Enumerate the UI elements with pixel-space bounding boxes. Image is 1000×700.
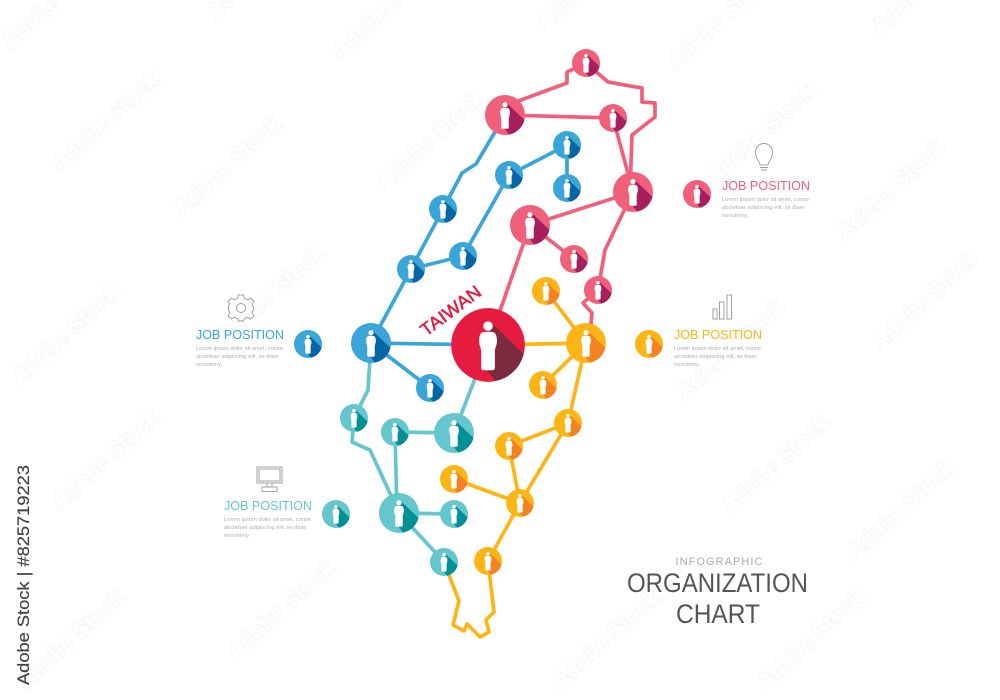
node: pink small south (584, 276, 612, 304)
panel: teal job position (224, 467, 350, 539)
text block: teal description: Lorem ipsum dolor sit amet, conse (224, 517, 311, 523)
node: orange hub (506, 489, 534, 517)
node: orange west (440, 465, 468, 493)
text block: orange description: abctetuer adipiscing elit, se diam (674, 354, 757, 360)
watermark pattern: Adobe Stock (672, 295, 789, 404)
blue nodes (351, 131, 581, 402)
node: teal right (440, 500, 468, 528)
watermark pattern: Adobe Stock (702, 80, 819, 189)
pink network lines (488, 63, 655, 345)
heading: job position orange: JOB POSITION (674, 327, 762, 342)
node: teal west (340, 404, 368, 432)
node: orange large (566, 323, 606, 363)
watermark pattern: Adobe Stock (7, 280, 124, 389)
heading: job position blue: JOB POSITION (196, 327, 284, 342)
watermark pattern: Adobe Stock (842, 455, 959, 564)
text block: pink description: nonummy. (722, 213, 749, 219)
node: orange south (474, 547, 502, 575)
text block: blue description: nonummy. (196, 362, 223, 368)
node: blue top (553, 131, 581, 159)
node: blue west upper (429, 195, 457, 223)
node: pink large central (510, 205, 550, 245)
node: teal large upper (434, 413, 474, 453)
text block: orange description: nonummy. (674, 362, 701, 368)
text block: blue description: Lorem ipsum dolor sit amet, conse (196, 346, 283, 352)
icon: computer (257, 467, 282, 492)
watermark pattern: Adobe Stock (752, 585, 869, 694)
watermark pattern: Adobe Stock (832, 135, 949, 244)
legend node: orange (635, 330, 663, 358)
pink nodes (485, 49, 653, 304)
panel: blue job position (196, 295, 322, 368)
title: chart: CHART (676, 599, 760, 629)
watermark pattern: Adobe Stock (867, 245, 984, 354)
heading: job position pink: JOB POSITION (722, 178, 810, 193)
node: teal large lower (379, 493, 419, 533)
panel: orange job position (635, 295, 762, 368)
heading: job position teal: JOB POSITION (224, 498, 312, 513)
title: organization: ORGANIZATION (627, 568, 808, 598)
watermark pattern: Adobe Stock (12, 585, 129, 694)
node: orange east (554, 409, 582, 437)
node: teal south (430, 548, 458, 576)
node: blue south (416, 374, 444, 402)
icon: gear (228, 295, 254, 321)
node: orange lower (529, 371, 557, 399)
watermark pattern: Adobe Stock (47, 405, 164, 514)
watermark pattern: Adobe Stock (222, 555, 339, 664)
node: blue west lower (397, 255, 425, 283)
orange nodes (440, 277, 606, 575)
node: blue central (449, 242, 477, 270)
title block (627, 556, 808, 629)
node: blue large (351, 323, 391, 363)
node: blue below top (553, 174, 581, 202)
orange network lines (444, 291, 586, 637)
text block: pink description: Lorem ipsum dolor sit amet, conse (722, 197, 809, 203)
node: central red hub (451, 308, 525, 382)
watermark pattern: Adobe Stock (169, 111, 286, 220)
text block: teal description: nonummy. (224, 533, 251, 539)
legend node: pink (683, 180, 711, 208)
text block: teal description: abctetuer adipiscing elit, se diam (224, 525, 307, 531)
label: Taiwan: TAIWAN (416, 281, 485, 340)
watermark pattern: Adobe Stock (717, 410, 834, 519)
teal nodes (340, 404, 474, 576)
node: pink large northwest (485, 95, 525, 135)
legend node: teal (322, 500, 350, 528)
icon: bar chart (713, 295, 732, 319)
watermark pattern: Adobe Stock (47, 67, 164, 176)
text block: blue description: abctetuer adipiscing elit, se diam (196, 354, 279, 360)
eyebrow: infographic: INFOGRAPHIC (676, 556, 763, 568)
watermark pattern: Adobe Stock (547, 585, 664, 694)
node: orange north (532, 277, 560, 305)
blue network lines (371, 115, 567, 388)
node: pink north tip (572, 49, 600, 77)
teal network lines (352, 343, 488, 562)
watermark pattern: Adobe Stock (212, 240, 329, 349)
node: pink northeast (599, 104, 627, 132)
node: orange central (495, 432, 523, 460)
node: teal middle (381, 418, 409, 446)
node: blue middle (495, 161, 523, 189)
text block: orange description: Lorem ipsum dolor sit amet, conse (674, 346, 761, 352)
legend node: blue (294, 330, 322, 358)
stock id caption: Adobe Stock | #825719223 (14, 465, 33, 685)
watermark pattern: Adobe Stock (372, 85, 489, 194)
node: pink large east (613, 172, 653, 212)
panel: pink job position (683, 144, 810, 219)
node: pink small central (560, 245, 588, 273)
text block: pink description: abctetuer adipiscing elit, se diam (722, 205, 805, 211)
icon: light bulb (756, 144, 772, 170)
